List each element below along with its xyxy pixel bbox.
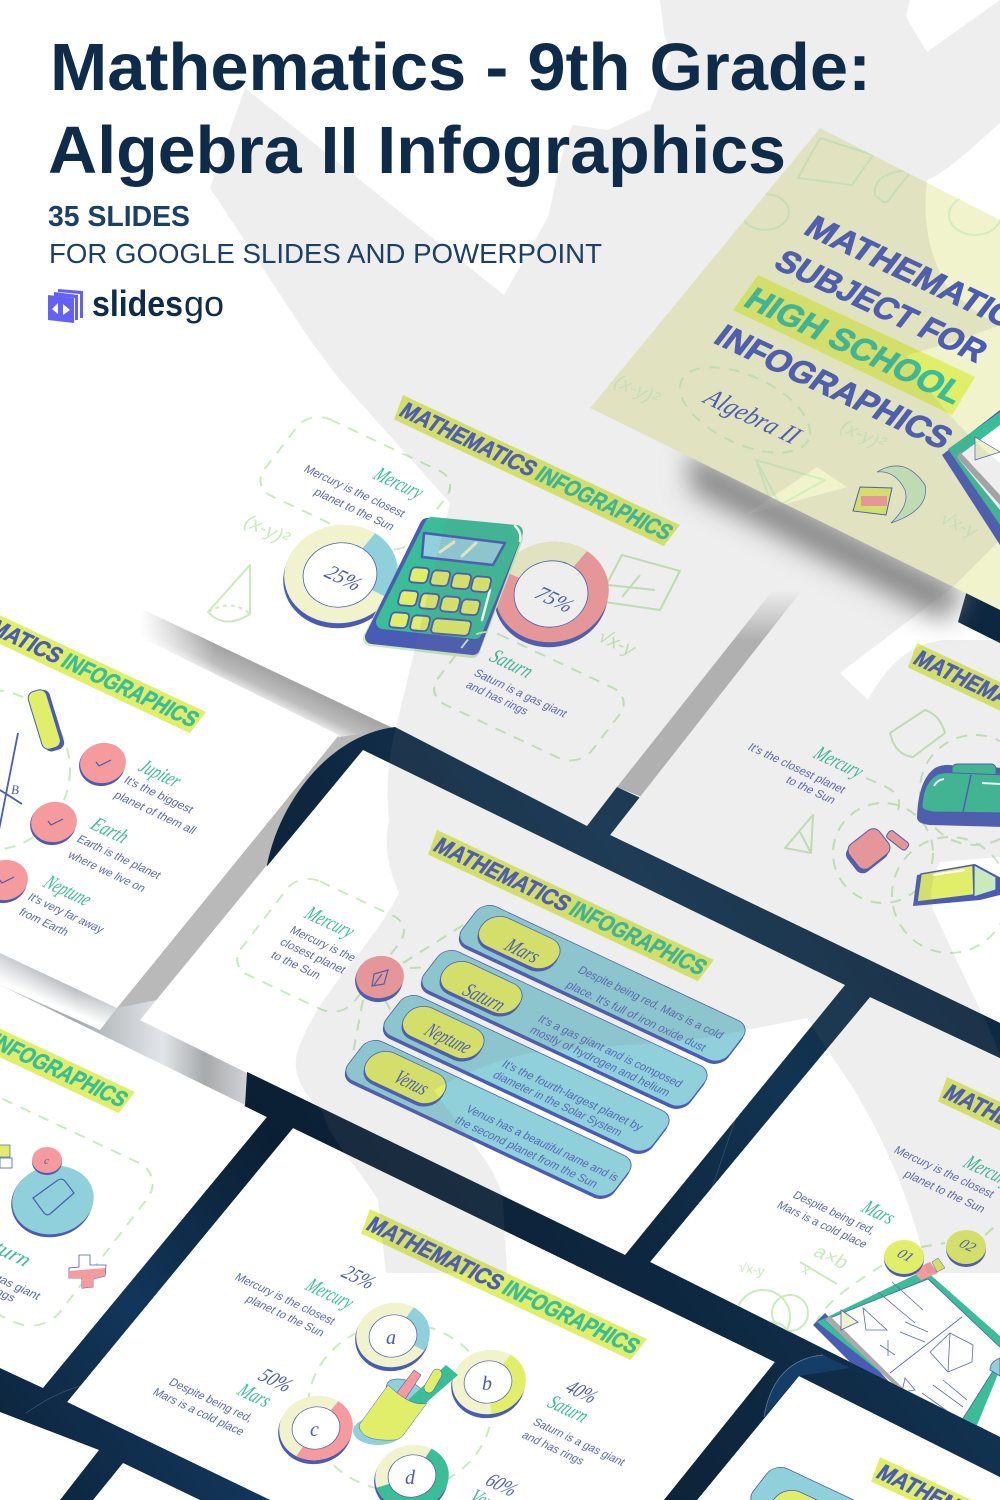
slide: lower right fragment — [697, 1376, 1000, 1500]
doodles — [208, 512, 680, 660]
main title: Mathematics - 9th Grade: — [50, 30, 871, 105]
slide heading bar — [908, 643, 1000, 711]
doughnut b: b — [482, 1373, 492, 1395]
row: Neptune: It's the fourth-largest planet by — [499, 1057, 646, 1133]
label: Mars: Mars — [856, 1196, 900, 1229]
stat: 50% Mars — [150, 1364, 297, 1438]
icon: pencil sharpener — [853, 466, 926, 523]
list item: Jupiter: planet of them all — [111, 788, 199, 837]
row: Venus: Venus has a beautiful name and is — [463, 1102, 622, 1184]
doodles: √x-y — [593, 627, 640, 660]
list item: Neptune: Neptune — [38, 871, 97, 910]
row: Venus: Venus — [389, 1066, 434, 1099]
list item: Neptune: from Earth — [16, 905, 72, 938]
icon: highlighter — [28, 689, 64, 752]
row: Mars — [453, 901, 751, 1068]
stat: 25% Mercury: Mercury is the closest — [232, 1270, 339, 1328]
row: Saturn: Saturn — [458, 979, 511, 1016]
row: Venus — [339, 1036, 637, 1203]
text: Mercury description: planet to the Sun — [901, 1167, 988, 1215]
list item: Earth: where we live on — [64, 848, 149, 895]
doughnut d — [346, 1413, 500, 1500]
subtitle: slide count: 35 SLIDES — [48, 201, 190, 233]
text: Mercury description: It's the closest planet — [745, 740, 849, 796]
slide: book with numbered steps — [650, 997, 1000, 1437]
stat: 25% Mercury: planet to the Sun — [243, 1292, 328, 1339]
slide: cover — [590, 128, 1000, 610]
label: Mercury: Mercury — [368, 463, 429, 503]
row: Saturn: mostly of hydrogen and helium — [527, 1023, 673, 1099]
label: Mercury: Mercury — [299, 902, 360, 942]
row: Saturn — [415, 946, 713, 1113]
text: Saturn description — [0, 1276, 40, 1302]
list item: Earth: Earth is the planet — [74, 832, 165, 882]
logo: slidesgo: slides — [92, 283, 183, 324]
doodles and dashed path: √x-y — [737, 1258, 766, 1279]
icon: pink eraser — [846, 828, 910, 874]
stat: 60% Venus — [465, 1469, 523, 1500]
text: Mars description: Mars is a cold place — [774, 1198, 871, 1251]
doughnut d: d — [405, 1467, 416, 1489]
stat: 25% Mercury: 25% — [337, 1261, 380, 1294]
cover title: HIGH SCHOOL — [737, 281, 972, 411]
main title — [48, 30, 871, 188]
slide heading bar — [938, 1077, 1000, 1130]
geometry figure — [0, 690, 70, 850]
dashed text box — [0, 1098, 154, 1326]
doodles and dashed circles — [785, 710, 1000, 953]
doodles and dashed path: x — [798, 1262, 814, 1277]
slide heading bar: INFOGRAPHICS — [564, 897, 712, 980]
icon: plus sign — [69, 1255, 106, 1288]
stat: 50% Mars: Despite being red, — [166, 1375, 256, 1425]
stat: 40% Saturn: 40% — [561, 1376, 603, 1408]
stat: 25% Mercury: Mercury — [300, 1274, 359, 1313]
text: Mercury description: Mercury is the — [287, 923, 359, 964]
subtitle: compatibility: FOR GOOGLE SLIDES AND POWERPOINT — [49, 238, 602, 269]
doughnut c — [272, 1368, 400, 1500]
icon: calculator — [371, 524, 520, 650]
dashed text box: Mercury — [228, 872, 413, 1019]
slide heading bar: MATHEMATICS — [361, 1212, 509, 1296]
doughnut a — [349, 1279, 480, 1378]
text: Saturn description: and has rings — [463, 678, 531, 717]
doodles: (x-y)² — [239, 512, 295, 549]
text: Mars description: Despite being red, — [790, 1188, 878, 1237]
icon: green eraser — [917, 764, 1000, 827]
list item: Jupiter: Jupiter — [134, 755, 187, 792]
row with pill — [745, 1463, 1000, 1500]
doodles — [609, 138, 1000, 542]
stat: 40% Saturn: Saturn — [543, 1391, 594, 1427]
list item: Neptune — [0, 860, 104, 936]
doughnut a: a — [386, 1327, 396, 1349]
text: Mercury description: to the Sun — [268, 948, 324, 981]
row: Saturn: It's a gas giant and is composed — [535, 1012, 686, 1090]
doodles and dashed path: a×b — [809, 1242, 853, 1273]
slide heading bar — [0, 615, 206, 734]
slide: Saturn tablet left — [0, 1028, 267, 1388]
slide heading bar: MATHEMATICS — [394, 398, 542, 482]
translucent grey background shape — [210, 0, 1000, 1273]
text: Mercury description: to the Sun — [783, 773, 839, 806]
slide: calculator with two doughnut charts — [208, 395, 680, 767]
slide fragments at the lower left — [0, 1412, 200, 1500]
slide heading bar — [0, 1028, 135, 1114]
doodles and dashed path — [737, 1227, 994, 1332]
doodles: (x-y)² — [609, 372, 665, 409]
main title: Algebra II Infographics — [48, 113, 786, 188]
icon: pen nib badge — [351, 951, 408, 1007]
Algebra II badge: Algebra II — [697, 382, 808, 450]
slide: pencil cup and four doughnuts — [67, 1128, 775, 1500]
cover title: INFOGRAPHICS — [707, 318, 960, 456]
icon: small notepad — [0, 1145, 12, 1168]
cover title — [707, 209, 1000, 456]
doughnut chart 25% — [283, 524, 398, 628]
icon: tablet on teal disc — [11, 1166, 94, 1238]
step badge 01 — [884, 1240, 924, 1277]
text: Mercury description — [268, 923, 359, 981]
doughnut chart 75% — [496, 542, 609, 648]
slide heading bar: INFOGRAPHICS — [497, 1276, 645, 1359]
step badge 01: 01 — [894, 1247, 917, 1266]
list item: Earth — [30, 802, 161, 892]
icon: pink badge: c — [44, 1155, 49, 1167]
doughnut chart 75%: 75% — [530, 582, 579, 617]
step badge 02: 02 — [956, 1237, 979, 1256]
dark navy backdrop — [0, 590, 1000, 1500]
stat: 40% Saturn: Saturn is a gas giant — [530, 1415, 629, 1469]
slide stack shadows — [0, 590, 802, 1105]
slide: planets list rows — [140, 750, 845, 1255]
text: Mercury description: closest planet — [277, 935, 350, 976]
list item: Earth: Earth — [85, 813, 134, 848]
doughnut b — [445, 1324, 590, 1444]
label: Saturn: Saturn — [485, 645, 538, 682]
slide: highlighter and erasers — [610, 614, 1000, 1023]
doodles: √x-y — [935, 509, 982, 542]
list item: Jupiter: It's the biggest — [121, 773, 197, 816]
dashed orbit — [308, 1323, 492, 1491]
stat: 50% Mars: 50% — [254, 1364, 297, 1397]
slide heading bar — [387, 395, 680, 546]
row: Mars: Mars — [499, 934, 545, 967]
icon: open book — [942, 410, 1000, 545]
icon: pink badge — [32, 1147, 62, 1175]
stat: 40% Saturn — [519, 1376, 629, 1469]
slide heading bar: INFOGRAPHICS — [56, 649, 204, 732]
icon: pencil cup — [353, 1365, 458, 1445]
geometry figure: B — [11, 782, 19, 797]
dashed text box: Saturn — [425, 625, 633, 767]
slide heading bar — [421, 830, 714, 981]
Algebra II badge — [667, 350, 823, 470]
stat: 50% Mars: Mars — [232, 1379, 276, 1412]
slide heading bar: INFOGRAPHICS — [530, 462, 678, 545]
row: Mars: place. It's full of iron oxide dust — [563, 978, 710, 1054]
doodles: (x-y)² — [835, 417, 891, 454]
text: Mercury description: Mercury is the closest — [301, 462, 409, 520]
doughnut c: c — [310, 1419, 319, 1441]
logo: slidesgo: go — [184, 283, 224, 324]
step badge 02 — [946, 1230, 986, 1267]
cover drop shadow — [690, 450, 965, 622]
row: Mars: Despite being red, Mars is a cold — [575, 963, 727, 1042]
stat: 25% Mercury — [232, 1261, 380, 1339]
dashed text box: Mercury — [251, 410, 459, 557]
dashed connectors — [353, 922, 468, 1060]
stat: 40% Saturn: and has rings — [519, 1428, 587, 1467]
stat: 50% Mars: Mars is a cold place — [150, 1385, 248, 1438]
row: Venus: the second planet from the Sun — [452, 1113, 601, 1190]
row: Neptune: Neptune — [419, 1019, 477, 1058]
list item: Neptune: It's very far away — [25, 890, 107, 936]
label: Mercury: Mercury — [808, 742, 869, 782]
icon: open book — [813, 1258, 1000, 1430]
list item: Jupiter — [79, 742, 197, 834]
row: Neptune: diameter in the Solar System — [490, 1068, 625, 1139]
logo: slidesgo — [48, 283, 224, 324]
doughnut chart 25%: 25% — [320, 561, 367, 595]
row: Neptune — [377, 991, 675, 1158]
text: Saturn description: Saturn is a gas giant — [471, 666, 571, 720]
slide heading bar: MATHEMATICS — [428, 833, 576, 917]
text: Mercury description: planet to the Sun — [311, 485, 397, 533]
slide: checklist left — [0, 615, 338, 1006]
slide heading bar — [354, 1209, 647, 1360]
icon: yellow highlighter — [913, 864, 1000, 906]
